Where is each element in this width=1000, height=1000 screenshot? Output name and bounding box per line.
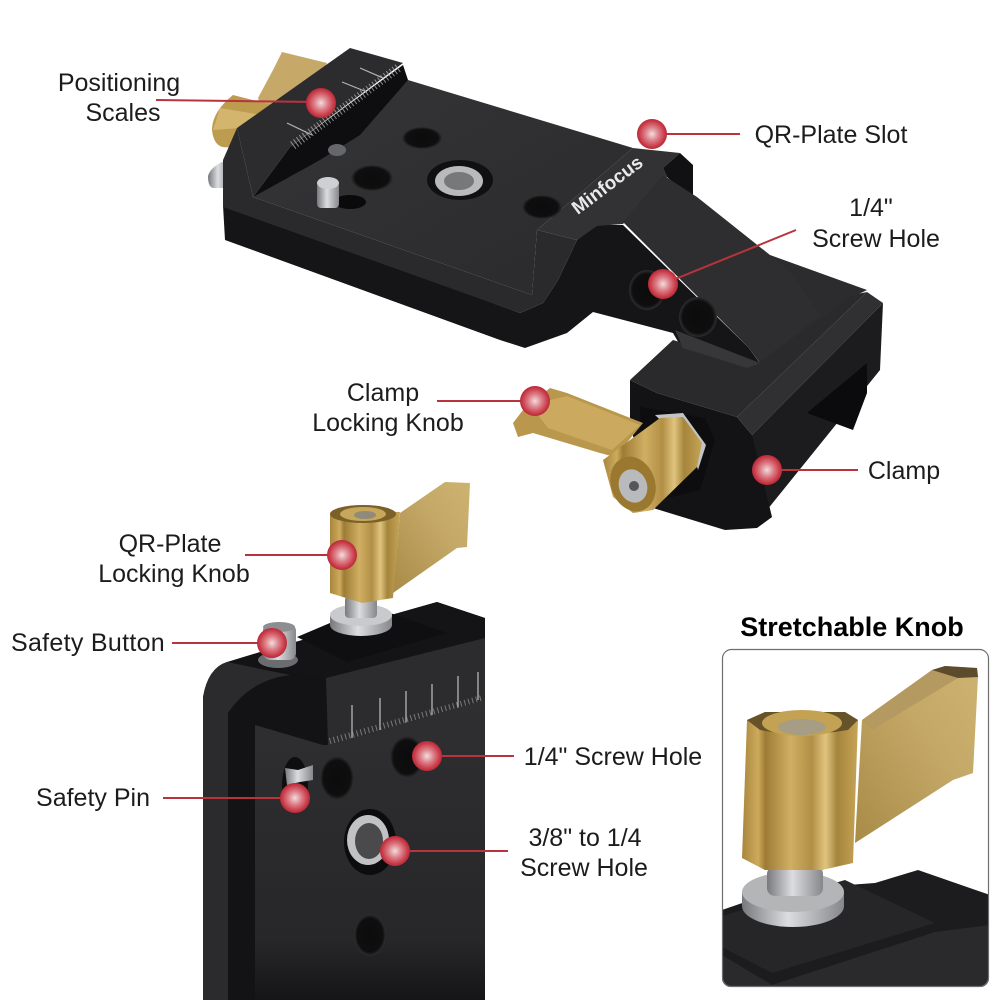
pad [722, 880, 935, 973]
callouts [11, 69, 940, 882]
callout: Positioning Scales: Positioning [58, 69, 180, 97]
steel stem [742, 866, 844, 927]
product: top view of clamp [208, 48, 883, 530]
callout: Clamp: Clamp [868, 457, 940, 485]
clamp gasket [640, 407, 715, 500]
safety pin [317, 177, 339, 208]
clamp right side [752, 303, 883, 528]
callout: Safety Pin [36, 783, 310, 813]
barrel top [747, 712, 858, 734]
plate silhouette [203, 602, 485, 1000]
front face [722, 925, 990, 987]
plate main surface [253, 80, 633, 295]
product: upright plate [203, 482, 485, 1000]
callout: 1/4 inch Screw Hole lower: 1/4" Screw Hole [524, 743, 702, 771]
brass barrel [742, 712, 858, 870]
callout: 3/8 to 1/4 Screw Hole [380, 824, 648, 882]
heading: Stretchable Knob: Stretchable Knob [740, 612, 964, 642]
safety button [258, 622, 298, 668]
callout: QR-Plate Locking Knob: QR-Plate [119, 530, 221, 558]
top surface [260, 602, 485, 678]
callout: Clamp [752, 455, 940, 485]
callout: 1/4 inch Screw Hole top [648, 194, 940, 299]
left rounded edge [203, 662, 290, 1000]
clamp right band [737, 292, 883, 435]
plate and arm side wall [223, 205, 762, 366]
wing cap [932, 666, 978, 678]
dark notch [663, 153, 693, 200]
panel border [722, 650, 988, 986]
screw holes [328, 127, 717, 337]
clamp back edge [760, 255, 867, 366]
close-up artwork [722, 666, 990, 987]
brass knob behind top plate [212, 52, 327, 147]
clamp front face [630, 380, 772, 530]
callout: Clamp Locking Knob: Clamp [347, 379, 419, 407]
callout: Clamp Locking Knob [312, 379, 550, 437]
inset face [255, 700, 485, 1000]
knob stem and washer [330, 596, 392, 636]
ridge with positioning scale [237, 48, 403, 197]
callout: Positioning Scales: Scales [85, 99, 161, 127]
callout: QR-Plate Slot [637, 119, 907, 149]
callout: Safety Button: Safety Button [11, 629, 165, 657]
callout: 1/4 inch Screw Hole top: 1/4" [849, 194, 893, 222]
ruler ticks [352, 672, 478, 738]
arm flap [675, 330, 760, 368]
callout: 3/8 to 1/4 Screw Hole: Screw Hole [520, 854, 648, 882]
callout: Positioning Scales [58, 69, 336, 127]
callout: 1/4 inch Screw Hole top: Screw Hole [812, 225, 940, 253]
callout: Clamp Locking Knob: Locking Knob [312, 409, 464, 437]
safety pin [285, 765, 313, 785]
callout: QR-Plate Locking Knob [98, 530, 357, 588]
callout: Safety Pin: Safety Pin [36, 784, 150, 812]
dark ridge face [253, 65, 408, 197]
wing bevel [862, 670, 958, 730]
mount pad [297, 613, 447, 662]
steel safety button [208, 162, 230, 188]
callout: 3/8 to 1/4 Screw Hole: 3/8" to 1/4 [528, 824, 642, 852]
arm top surface [623, 175, 820, 363]
brass wing [855, 666, 978, 843]
screw holes [282, 736, 424, 956]
brand band [537, 148, 680, 240]
callout: 1/4 inch Screw Hole lower [412, 741, 702, 771]
clamp rail opening [807, 363, 867, 430]
plate rim [223, 128, 577, 313]
callout: QR-Plate Locking Knob: Locking Knob [98, 560, 250, 588]
QR-plate knob [330, 482, 470, 603]
callout: Safety Button [11, 628, 287, 658]
brand text: Minfocus [568, 152, 647, 219]
panel: stretchable knob close-up [722, 649, 990, 987]
back block [722, 870, 990, 987]
callout: QR-Plate Slot: QR-Plate Slot [755, 121, 907, 149]
clamp top surface [630, 292, 867, 417]
ruler strip [326, 638, 485, 745]
clamp locking knob [513, 388, 706, 518]
engraved scale ticks [287, 68, 398, 146]
